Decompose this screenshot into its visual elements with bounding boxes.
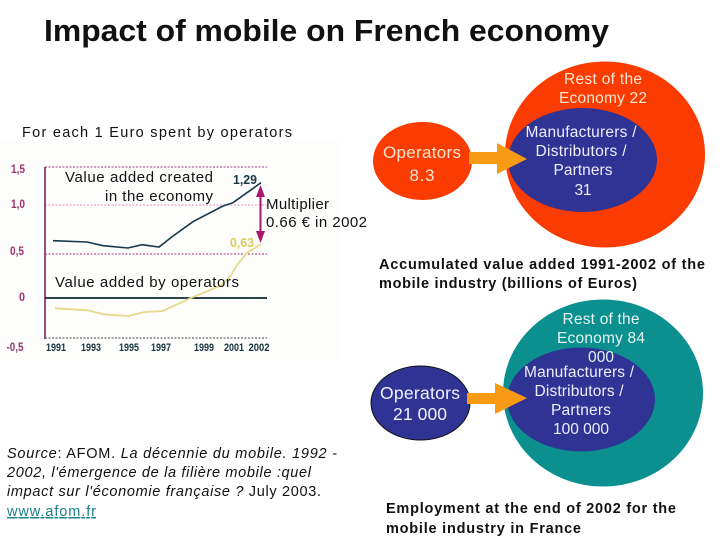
label: multiplier: 0.66 € in 2002 <box>266 214 367 231</box>
caption: accumulated value: mobile industry (billions of Euros) <box>379 276 637 292</box>
bubble: manufacturers <box>508 108 657 212</box>
text: operators: 21 000 <box>393 404 447 424</box>
y axis labels: 0 <box>19 292 25 304</box>
text: manufacturers: Distributors / <box>534 383 624 400</box>
text: rest of economy: Economy 84 <box>557 330 645 347</box>
bubble: operators <box>371 366 470 440</box>
value label 1,29: 1,29 <box>233 172 257 187</box>
bubble diagram: accumulated value added <box>373 62 705 248</box>
line: value added created in the economy <box>53 183 261 248</box>
x axis labels: 1995 <box>119 342 139 354</box>
arrow: operators to manufacturers <box>469 143 527 174</box>
y axis labels <box>6 164 26 354</box>
chart heading: For each 1 Euro spent by operators <box>22 125 292 141</box>
label: value added created: in the economy <box>105 188 214 205</box>
y axis labels: 1,5 <box>11 164 26 176</box>
text: operators: 8.3 <box>410 166 434 185</box>
text: manufacturers: 31 <box>574 182 592 199</box>
source note: www.afom.fr <box>6 504 96 520</box>
source note: 2002, l'émergence de la filière mobile :quel <box>6 465 312 481</box>
bubble: rest of the economy <box>503 300 703 486</box>
text: manufacturers: Partners <box>554 162 613 179</box>
x axis labels: 1999 <box>194 342 214 354</box>
text: manufacturers: 100 000 <box>553 421 609 438</box>
arrow: operators to manufacturers <box>467 383 527 414</box>
line: value added by operators <box>55 244 261 316</box>
text: operators: Operators <box>380 383 460 403</box>
text: rest of economy: 000 <box>588 349 614 366</box>
source note <box>6 446 337 520</box>
label: value added created: Value added created <box>65 169 213 186</box>
text: operators: Operators <box>383 143 461 162</box>
bubble diagram: employment <box>371 300 703 486</box>
x axis labels: 1997 <box>151 342 171 354</box>
x axis labels: 2001 <box>224 342 244 354</box>
caption: accumulated value: Accumulated value added 1991-2002 of the <box>379 257 705 273</box>
source note: impact sur l'économie française ? July 2003. <box>7 484 321 500</box>
text: manufacturers: Distributors / <box>536 143 627 160</box>
text: manufacturers: Manufacturers / <box>526 124 637 141</box>
y axis labels: -0,5 <box>6 342 24 354</box>
line chart: value added <box>0 140 340 360</box>
text: manufacturers: Manufacturers / <box>524 364 635 381</box>
caption: employment: mobile industry in France <box>386 521 581 537</box>
x axis labels: 2002 <box>248 342 270 354</box>
text: manufacturers: Partners <box>551 402 611 419</box>
label: multiplier: Multiplier <box>266 196 329 213</box>
arrow: multiplier <box>256 185 265 243</box>
caption: employment: Employment at the end of 2002 for the <box>386 501 676 517</box>
x axis labels: 1991 <box>46 342 66 354</box>
title: Impact of mobile on French economy <box>44 13 610 48</box>
y axis labels: 1,0 <box>11 199 25 211</box>
y axis labels: 0,5 <box>10 246 25 258</box>
text: rest of economy: Rest of the <box>564 71 642 88</box>
source note: Source: AFOM. La décennie du mobile. 1992 - <box>7 446 337 462</box>
bubble: operators <box>373 122 472 200</box>
bubble: rest of the economy <box>505 62 705 248</box>
x axis labels: 1993 <box>81 342 101 354</box>
text: rest of economy: Rest of the <box>562 311 640 328</box>
x axis labels <box>46 342 270 354</box>
value label 0,63: 0,63 <box>230 235 254 250</box>
text: rest of economy: Economy 22 <box>559 90 647 107</box>
label: value added by operators: Value added by operators <box>55 274 239 291</box>
bubble: manufacturers <box>507 348 655 452</box>
